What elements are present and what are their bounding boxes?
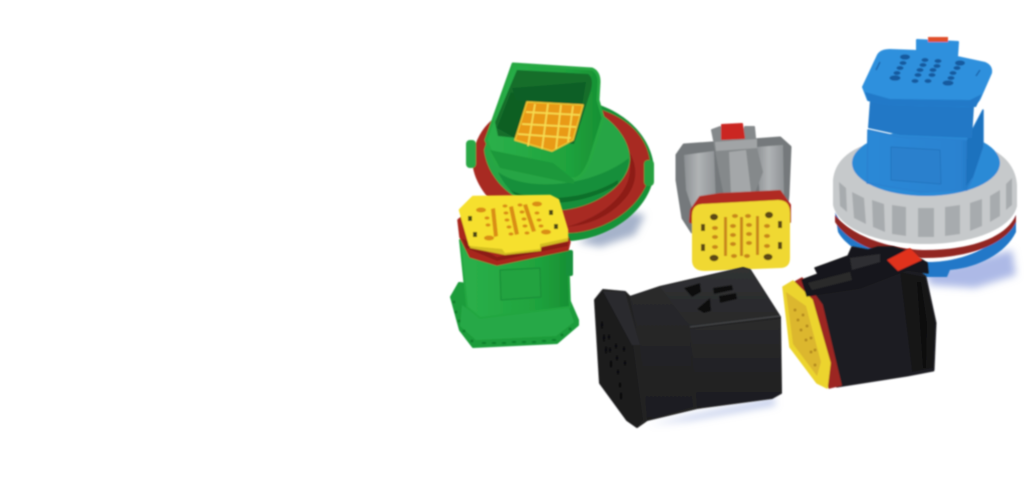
ring recesses — [839, 178, 1012, 237]
pin holes — [890, 54, 965, 86]
inner blue well — [852, 130, 1000, 196]
black body — [808, 262, 935, 386]
red seal — [458, 210, 570, 265]
middle section — [630, 287, 693, 420]
green flange disc — [478, 105, 654, 241]
red seal — [793, 278, 841, 388]
gray nut ring — [833, 137, 1017, 244]
cavities — [701, 212, 782, 261]
connector: blue plug with gray nut ring — [833, 37, 1017, 277]
shadows under the connectors — [578, 212, 1016, 424]
latch window marks — [684, 283, 737, 313]
yellow insert inside socket — [515, 102, 583, 151]
connector: black housing front — [595, 268, 781, 427]
green inner collar — [484, 102, 630, 210]
gray shell — [677, 138, 790, 232]
front face — [595, 291, 643, 427]
green body — [460, 240, 570, 318]
connector: black housing with yellow side face — [783, 247, 935, 388]
blue cap — [863, 40, 991, 106]
cavities — [601, 321, 626, 400]
yellow side face — [783, 281, 830, 388]
blue flange — [835, 212, 1016, 277]
connector: green box plug with yellow face — [451, 196, 578, 347]
blue lower body — [867, 110, 983, 192]
gray latch — [712, 127, 762, 196]
top plate — [660, 268, 780, 327]
red lock tab — [887, 248, 922, 271]
base flange — [451, 283, 578, 347]
front shell — [690, 319, 781, 408]
red seal — [690, 191, 790, 225]
red lock tab — [722, 124, 744, 139]
yellow face plate — [460, 196, 567, 252]
square socket shell — [486, 64, 603, 179]
cavities — [794, 308, 816, 366]
red seal ring — [472, 105, 650, 233]
red lock tab — [928, 37, 948, 42]
black body outline — [595, 268, 781, 427]
black latch — [802, 247, 928, 296]
connector: gray housing with yellow face — [677, 124, 790, 271]
connector: green round-flange plug with red seal — [466, 64, 654, 241]
side tabs — [466, 140, 476, 168]
yellow face — [692, 200, 790, 271]
blue upper body — [868, 100, 974, 138]
red seal — [835, 215, 1016, 258]
terminal cavities — [476, 202, 551, 240]
